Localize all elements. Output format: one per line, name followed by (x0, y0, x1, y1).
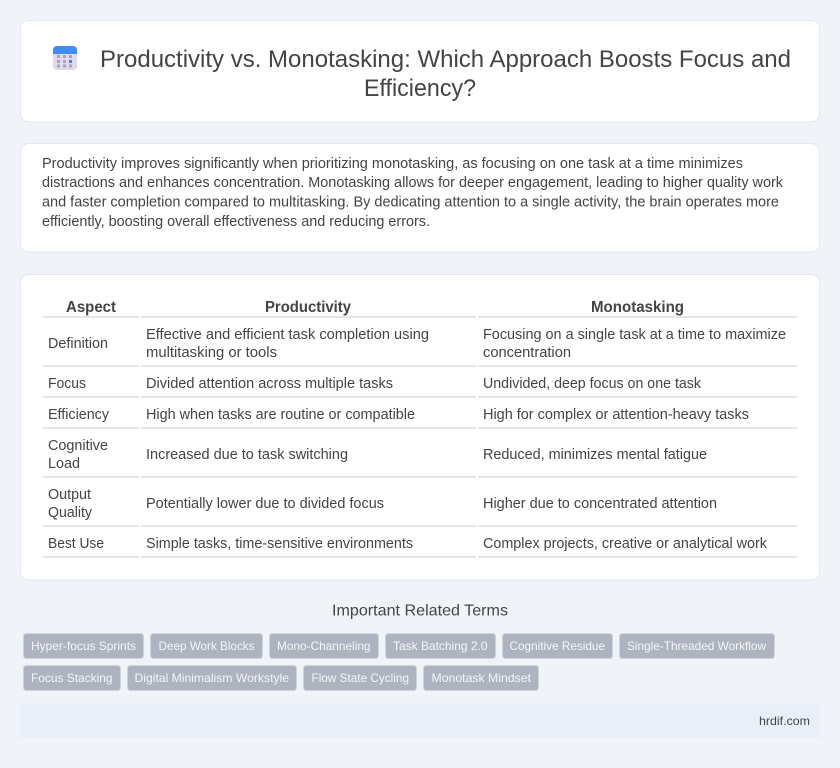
row: efficiency (48, 407, 749, 423)
tag: Task Batching 2.0 (386, 634, 496, 658)
table header row (66, 299, 684, 316)
row: definition (48, 327, 786, 361)
row: output quality: Potentially lower due to divided focus (146, 496, 384, 512)
tag: Deep Work Blocks (150, 634, 262, 658)
row: focus (48, 376, 702, 392)
tag: Single-Threaded Workflow (620, 634, 774, 658)
row: focus: Undivided, deep focus on one task (483, 376, 702, 392)
row: best use: Complex projects, creative or analytical work (483, 536, 768, 552)
row: focus: Divided attention across multiple tasks (146, 376, 393, 392)
row: definition: Focusing on a single task at a time to maximize (483, 327, 786, 343)
row: output quality (48, 487, 717, 521)
row: cognitive load: Cognitive (48, 438, 108, 454)
table header row: Aspect (66, 299, 117, 316)
tag: Digital Minimalism Workstyle: Digital Minimalism Workstyle (134, 671, 289, 685)
row: output quality: Higher due to concentrated attention (483, 496, 717, 512)
intro paragraph: distractions and enhances concentration. Monotasking allows for deeper engagement, leading to higher quality work (42, 175, 784, 191)
intro paragraph: efficiently, boosting overall effectiveness and reducing errors. (42, 214, 430, 230)
row: focus: Focus (48, 376, 86, 392)
row: cognitive load: Increased due to task switching (146, 447, 348, 463)
tag: Focus Stacking: Focus Stacking (31, 671, 112, 685)
title (100, 46, 791, 102)
row: best use (48, 536, 768, 552)
row: efficiency: High for complex or attention-heavy tasks (483, 407, 749, 423)
footer: hrdif.com (759, 714, 810, 728)
tag: Deep Work Blocks: Deep Work Blocks (158, 639, 254, 653)
tag: Mono-Channeling: Mono-Channeling (277, 639, 370, 653)
heading: related terms: Important Related Terms (332, 602, 508, 620)
tag: Flow State Cycling: Flow State Cycling (312, 671, 409, 685)
footer (20, 704, 820, 738)
icon: calendar (53, 46, 77, 70)
intro paragraph (42, 156, 784, 230)
panel: introduction (20, 144, 820, 252)
panel: comparison table (20, 274, 820, 580)
tag: Hyper-focus Sprints (24, 634, 144, 658)
tag: Focus Stacking (24, 666, 120, 690)
tag: Mono-Channeling (270, 634, 378, 658)
row: definition: multitasking or tools (146, 345, 277, 361)
row: best use: Best Use (48, 536, 104, 552)
tag: Monotask Mindset (424, 666, 538, 690)
row: output quality: Quality (48, 505, 93, 521)
row: definition: concentration (483, 345, 571, 361)
row: definition: Effective and efficient task completion using (146, 327, 429, 343)
row: output quality: Output (48, 487, 91, 503)
row: efficiency: High when tasks are routine or compatible (146, 407, 415, 423)
table header row: Productivity (265, 299, 351, 316)
row: best use: Simple tasks, time-sensitive environments (146, 536, 413, 552)
row: definition: Definition (48, 336, 108, 352)
row: cognitive load: Reduced, minimizes mental fatigue (483, 447, 707, 463)
row: efficiency: Efficiency (48, 407, 110, 423)
row: cognitive load: Load (48, 456, 80, 472)
tag: Cognitive Residue: Cognitive Residue (510, 639, 605, 653)
panel: header (20, 20, 820, 122)
row: cognitive load (48, 438, 707, 472)
tag: Flow State Cycling (304, 666, 416, 690)
intro paragraph: Productivity improves significantly when prioritizing monotasking, as focusing on one task at a time minimizes (42, 156, 743, 172)
tag: Task Batching 2.0: Task Batching 2.0 (393, 639, 488, 653)
related term tags (24, 634, 774, 690)
intro paragraph: and faster completion compared to multitasking. By dedicating attention to a single activity, the brain operates more (42, 194, 779, 210)
tag: Digital Minimalism Workstyle (128, 666, 296, 690)
tag: Monotask Mindset: Monotask Mindset (432, 671, 532, 685)
tag: Cognitive Residue (502, 634, 612, 658)
title: Productivity vs. Monotasking: Which Approach Boosts Focus and (100, 46, 791, 73)
title: Efficiency? (364, 75, 476, 102)
table header row: Monotasking (591, 299, 684, 316)
tag: Single-Threaded Workflow: Single-Threaded Workflow (627, 639, 766, 653)
tag: Hyper-focus Sprints: Hyper-focus Sprints (31, 639, 136, 653)
